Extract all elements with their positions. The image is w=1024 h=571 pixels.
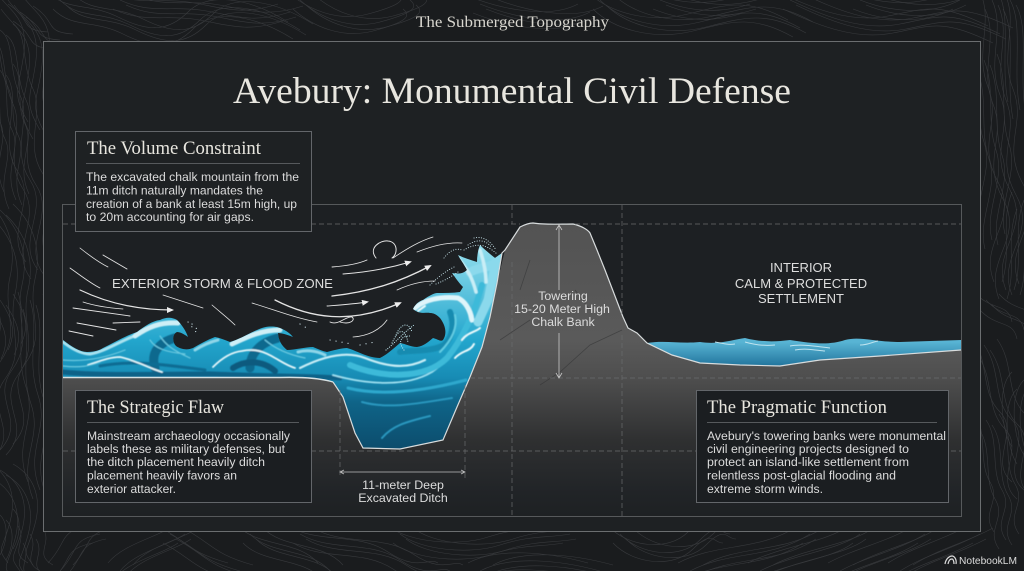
label: interior: CALM & PROTECTED [735, 276, 867, 291]
label: interior [735, 260, 867, 306]
label: interior: SETTLEMENT [758, 291, 844, 306]
label: ditch [358, 478, 448, 505]
diagram: cross-section [62, 204, 962, 516]
bank height arrow [556, 225, 562, 378]
surface line under exterior water [63, 377, 333, 382]
label: chalk bank: Towering [538, 289, 588, 303]
outer panel [44, 42, 980, 532]
body text: exterior attacker. [87, 482, 176, 496]
body text: placement heavily favors an [87, 468, 237, 482]
body text: Mainstream archaeology occasionally [87, 429, 291, 443]
ground texture cracks [500, 260, 622, 385]
calm water ripples [715, 341, 878, 351]
label: exterior zone: EXTERIOR STORM & FLOOD ZONE [112, 276, 333, 291]
dashed guide lines [63, 205, 961, 516]
NotebookLM badge: NotebookLM [959, 555, 1017, 567]
water body [63, 245, 502, 449]
ditch water and storm wave [63, 245, 502, 449]
wind arrows [69, 237, 462, 337]
ground: chalk bank and ditch profile [63, 223, 961, 516]
label: chalk bank: 15-20 Meter High [514, 302, 610, 316]
label: chalk bank [514, 289, 610, 329]
panel: The Volume Constraint [76, 132, 312, 232]
heading: The Pragmatic Function [707, 398, 887, 418]
body text: extreme storm winds. [707, 482, 823, 496]
heading: The Volume Constraint [87, 139, 262, 159]
ground surface outline [333, 223, 961, 449]
heading: The Strategic Flaw [87, 398, 225, 418]
panel: The Pragmatic Function [696, 390, 948, 502]
interior calm water [647, 338, 961, 366]
spray droplets [188, 238, 497, 350]
body text [87, 429, 291, 496]
wave swirls [63, 250, 496, 438]
body text: 11m ditch naturally mandates the [86, 184, 263, 198]
body text: The excavated chalk mountain from the [86, 170, 299, 184]
body text: labels these as military defenses, but [87, 442, 286, 456]
body text: the ditch placement heavily ditch [87, 455, 265, 469]
label: interior: INTERIOR [770, 260, 832, 275]
supertitle: The Submerged Topography [416, 14, 609, 31]
label: chalk bank: Chalk Bank [531, 315, 595, 329]
body text: Avebury's towering banks were monumental [707, 429, 946, 443]
body text: to 20m accounting for air gaps. [86, 210, 254, 224]
panel: The Strategic Flaw [76, 390, 312, 502]
body text [86, 170, 299, 224]
body text: protect an island-like settlement from [707, 455, 909, 469]
ditch width arrow [340, 470, 465, 474]
main title: Avebury: Monumental Civil Defense [233, 71, 791, 112]
body text: creation of a bank at least 15m high, up [86, 197, 297, 211]
label: ditch: 11-meter Deep [362, 478, 444, 492]
diagram frame [62, 204, 962, 516]
body text [707, 429, 946, 496]
label: ditch: Excavated Ditch [358, 491, 448, 505]
body text: civil engineering projects designed to [707, 442, 909, 456]
body text: relentless post-glacial flooding and [707, 468, 896, 482]
